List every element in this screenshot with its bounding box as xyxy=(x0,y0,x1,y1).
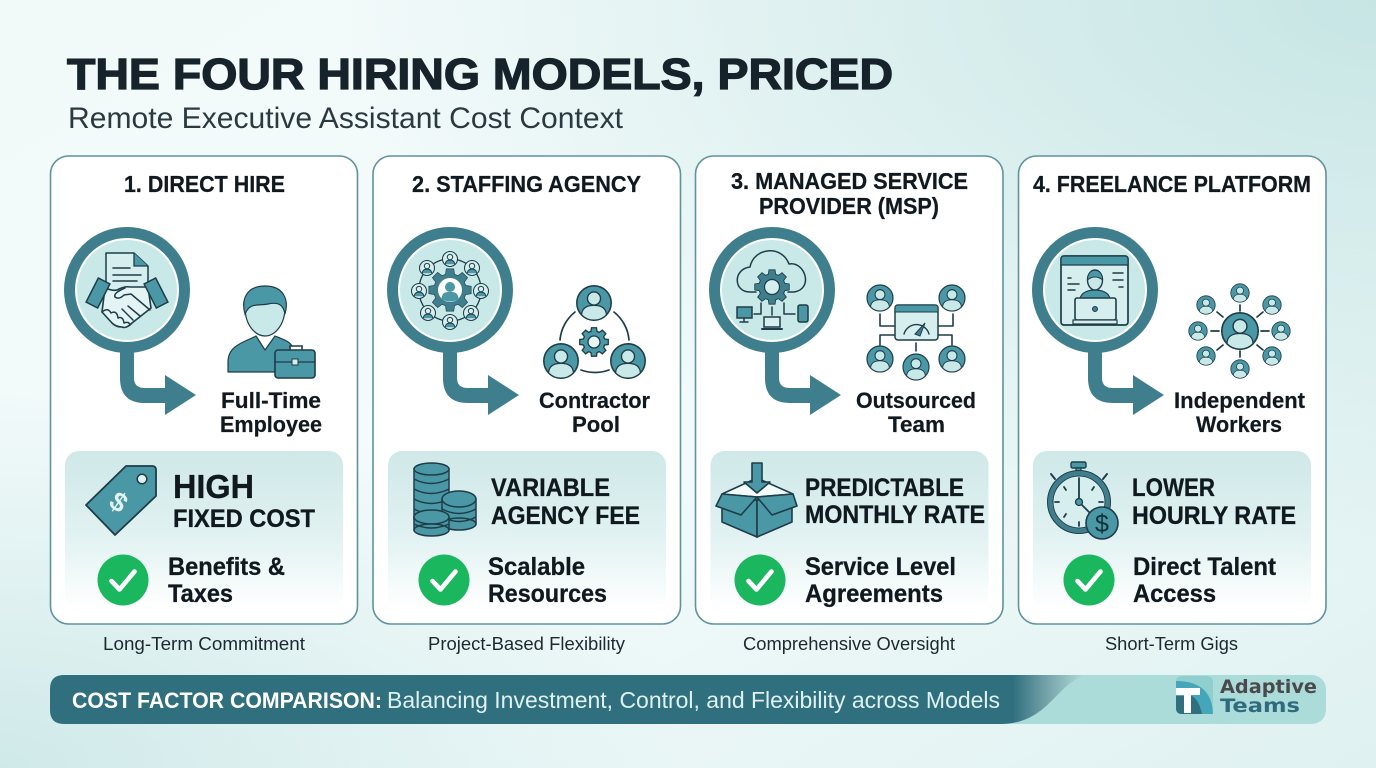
icon: outsourced team xyxy=(867,285,965,380)
icon: check xyxy=(98,554,148,606)
benefit text xyxy=(488,553,607,608)
icon: full-time employee xyxy=(228,286,315,378)
icon: coin stacks xyxy=(414,463,476,536)
benefit text: Resources xyxy=(488,580,607,608)
label: independent workers: Workers xyxy=(1196,412,1282,437)
heading: direct hire: 1. DIRECT HIRE xyxy=(124,171,285,197)
panel: staffing agency xyxy=(373,156,680,624)
banner text: COST FACTOR COMPARISON: xyxy=(72,688,382,713)
benefit text: Direct Talent xyxy=(1133,553,1277,581)
caption: direct hire: Long-Term Commitment xyxy=(103,634,305,654)
cost label: HOURLY RATE xyxy=(1132,502,1296,530)
benefit text: Scalable xyxy=(488,553,585,581)
benefit text: Taxes xyxy=(168,580,233,608)
cost label: VARIABLE xyxy=(491,474,610,502)
caption: freelance platform: Short-Term Gigs xyxy=(1105,634,1238,654)
label: contractor pool: Contractor xyxy=(539,388,650,413)
cost label: FIXED COST xyxy=(173,505,315,533)
icon: check xyxy=(1064,554,1114,606)
panel: direct hire xyxy=(50,156,358,624)
icon: stopwatch with dollar coin xyxy=(1048,462,1118,539)
label: full-time employee: Full-Time xyxy=(221,388,321,413)
benefit text: Benefits & xyxy=(168,553,285,581)
arrow xyxy=(1088,348,1164,415)
icon: cloud services lens xyxy=(714,232,830,348)
benefit text xyxy=(1133,553,1277,608)
arrow xyxy=(765,348,841,415)
cost label: MONTHLY RATE xyxy=(805,501,985,529)
cost label xyxy=(1132,474,1296,530)
cost label: AGENCY FEE xyxy=(491,502,640,530)
cost panel: lower hourly rate xyxy=(1033,451,1311,609)
icon: price tag xyxy=(86,466,156,535)
icon: box xyxy=(716,463,797,537)
cost panel: predictable monthly rate xyxy=(710,451,988,609)
footer banner xyxy=(50,675,1326,724)
benefit text: Agreements xyxy=(805,580,943,608)
heading: managed service provider xyxy=(731,168,968,219)
label: full-time employee xyxy=(220,388,322,437)
label: outsourced team: Team xyxy=(888,412,945,437)
cost label xyxy=(173,468,315,533)
cost panel: high fixed cost xyxy=(65,451,343,609)
benefit text xyxy=(168,553,285,608)
icon: independent workers xyxy=(1189,284,1290,378)
icon: freelancer window lens xyxy=(1038,232,1152,348)
benefit text xyxy=(805,553,956,608)
panel: managed service provider xyxy=(696,156,1003,624)
benefit text: Service Level xyxy=(805,553,956,581)
benefit text: Access xyxy=(1133,580,1216,608)
title: THE FOUR HIRING MODELS, PRICED xyxy=(67,50,893,99)
caption: staffing agency: Project-Based Flexibility xyxy=(428,634,625,654)
panel: freelance platform xyxy=(1018,156,1326,624)
label: contractor pool xyxy=(539,388,650,437)
icon: stopwatch with dollar coin: $ xyxy=(1095,510,1109,538)
icon: check xyxy=(418,554,470,606)
subtitle: Remote Executive Assistant Cost Context xyxy=(68,102,624,135)
icon: contractor pool xyxy=(544,286,645,378)
cost label xyxy=(805,474,985,529)
label: full-time employee: Employee xyxy=(220,412,322,437)
label: independent workers: Independent xyxy=(1174,388,1306,413)
label: independent workers xyxy=(1174,388,1306,437)
logo: Adaptive Teams xyxy=(1176,676,1317,717)
icon: staffing network lens xyxy=(392,232,508,348)
cost label: LOWER xyxy=(1132,474,1215,502)
arrow xyxy=(443,348,519,415)
logo: Adaptive Teams: Teams xyxy=(1220,695,1300,717)
heading: freelance platform: 4. FREELANCE PLATFORM xyxy=(1033,171,1311,197)
label: contractor pool: Pool xyxy=(572,412,620,437)
heading: managed service provider: PROVIDER (MSP) xyxy=(759,193,939,219)
cost label: HIGH xyxy=(173,468,254,505)
footer banner: Balancing Investment, Control, and Flexibility across Models xyxy=(387,687,1000,713)
label: outsourced team xyxy=(856,388,976,437)
caption: managed service provider: Comprehensive Oversight xyxy=(743,634,955,654)
cost label xyxy=(491,474,640,530)
icon: handshake lens xyxy=(70,232,184,348)
cost panel: variable agency fee xyxy=(388,451,666,609)
label: outsourced team: Outsourced xyxy=(856,388,976,413)
arrow xyxy=(120,348,196,415)
logo: Adaptive Teams: Adaptive xyxy=(1220,676,1317,698)
cost label: PREDICTABLE xyxy=(805,474,964,502)
heading: managed service provider: 3. MANAGED SERVICE xyxy=(731,168,968,194)
heading: staffing agency: 2. STAFFING AGENCY xyxy=(412,171,641,197)
icon: price tag: $ xyxy=(104,486,133,519)
icon: check xyxy=(734,554,786,606)
